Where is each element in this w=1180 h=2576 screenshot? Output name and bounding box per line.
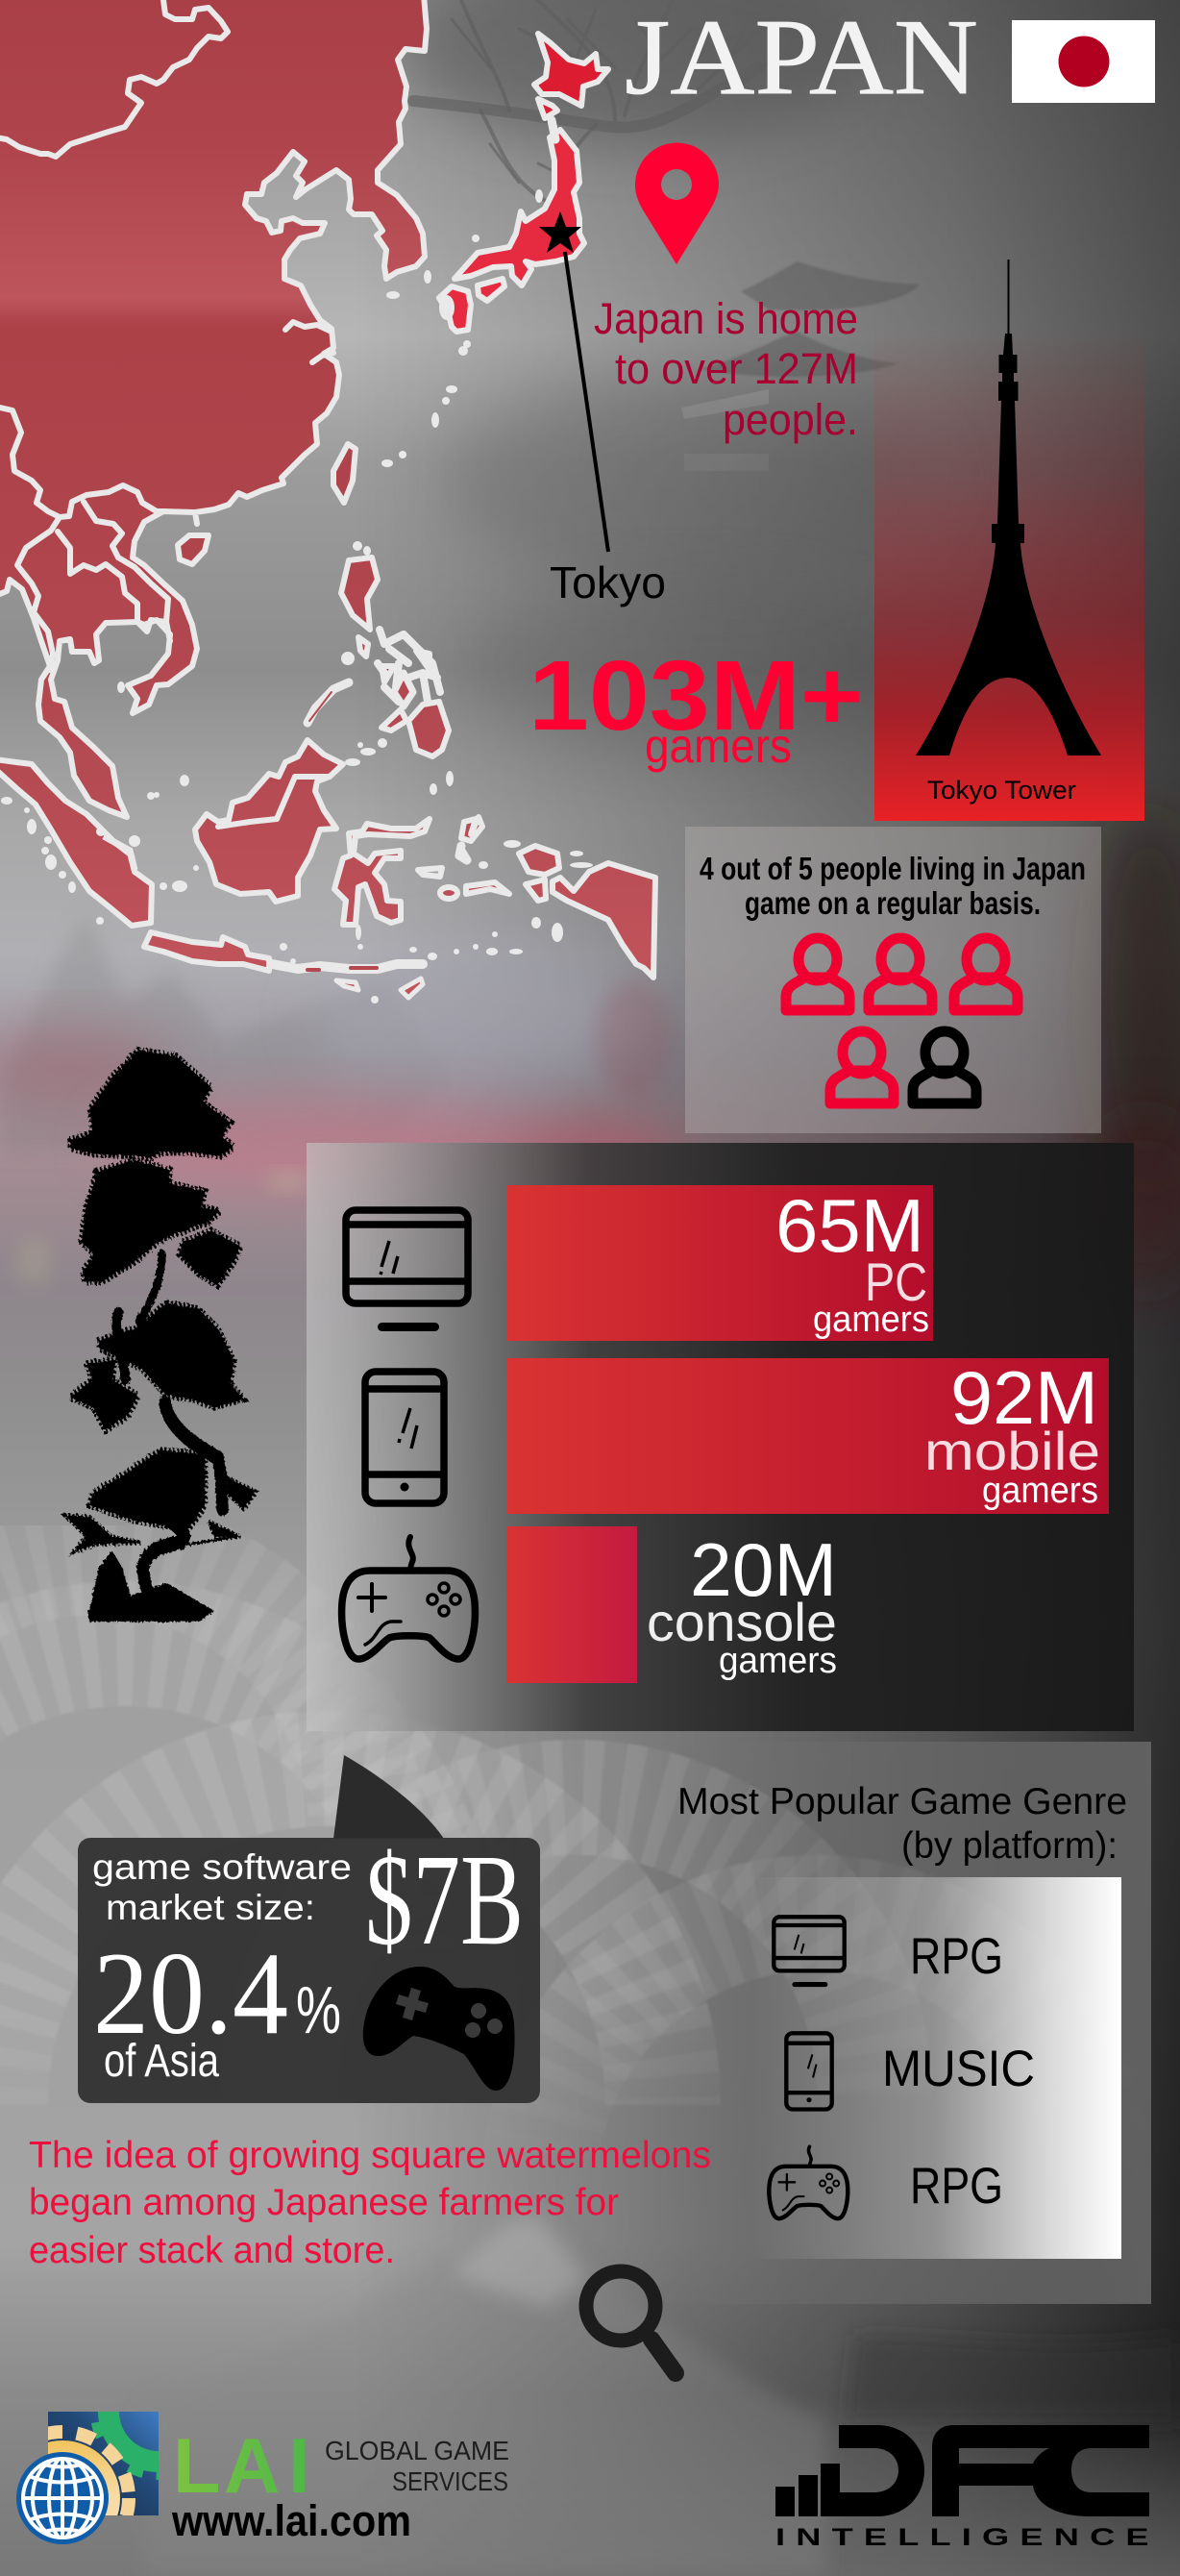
shark fin shape xyxy=(333,1755,444,1839)
bar: console xyxy=(506,1526,837,1683)
population text: to over 127M xyxy=(615,344,858,393)
genre row: pc rpg xyxy=(774,1917,1003,1987)
icon: japanese flag xyxy=(1012,20,1155,103)
genre row: mobile music: MUSIC xyxy=(882,2041,1035,2097)
bar: mobile: gamers xyxy=(982,1471,1098,1511)
lai url: www.lai.com xyxy=(171,2496,411,2545)
panel: market size: market size: xyxy=(106,1888,315,1927)
lai tagline: GLOBAL GAME xyxy=(325,2436,509,2465)
icon: tokyo tower xyxy=(916,260,1101,755)
bar: mobile: mobile xyxy=(924,1421,1100,1481)
bar: pc xyxy=(507,1183,933,1341)
lesser sunda xyxy=(272,964,423,969)
population text: Japan is home xyxy=(594,294,858,343)
panel: market size xyxy=(78,1755,540,2103)
lai emblem xyxy=(16,2412,159,2544)
dfc bars xyxy=(775,2464,840,2516)
palawan xyxy=(307,682,349,723)
new guinea head xyxy=(519,846,559,875)
mainland xyxy=(0,0,427,817)
stat: gamers total: 103M+ xyxy=(529,640,864,751)
genre heading: (by platform): xyxy=(901,1825,1118,1867)
lai tagline xyxy=(325,2436,509,2496)
genre row: mobile music xyxy=(786,2033,1035,2109)
bar: console: console xyxy=(647,1592,837,1652)
northern tip xyxy=(538,99,557,118)
lower right roof xyxy=(846,2335,1180,2422)
tokyo pointer line xyxy=(565,252,608,552)
hainan xyxy=(178,535,209,564)
bonsai tree silhouette xyxy=(64,1051,257,1621)
title: JAPAN xyxy=(625,0,978,117)
lai tagline: SERVICES xyxy=(392,2466,508,2496)
logo: lai xyxy=(16,2412,508,2544)
top pine branches xyxy=(413,0,846,207)
sulawesi xyxy=(334,819,430,925)
panel: market size: game software xyxy=(92,1847,352,1887)
panel: market size: $7B xyxy=(365,1828,524,1972)
mindanao xyxy=(408,702,449,756)
bar: pc: 65M xyxy=(775,1183,924,1268)
forest and autumn reds xyxy=(0,913,452,1153)
watermelon fact: The idea of growing square watermelons xyxy=(29,2135,711,2176)
icon: gamepad xyxy=(342,1537,475,1659)
panel: tokyo tower xyxy=(874,260,1144,821)
watermelon fact xyxy=(29,2135,711,2271)
people icons xyxy=(786,938,1018,1103)
panel text: 4 out of 5 people living in Japan xyxy=(700,851,1086,886)
watermelon fact: began among Japanese farmers for xyxy=(29,2182,619,2223)
bar: console: gamers xyxy=(719,1641,837,1681)
watermelon fact: easier stack and store. xyxy=(29,2230,395,2271)
hokkaido xyxy=(534,34,608,106)
bar: pc: PC xyxy=(865,1251,927,1312)
genre row: console rpg: RPG xyxy=(910,2158,1003,2215)
icon: black gamepad xyxy=(363,1967,515,2091)
panel: most popular genre xyxy=(615,1742,1151,2304)
taiwan xyxy=(333,444,356,503)
icon: star marking tokyo xyxy=(539,211,581,253)
panel: market size: of Asia xyxy=(104,2036,219,2087)
temple silhouette xyxy=(700,261,921,377)
panel: market size: 20.4 xyxy=(93,1927,288,2059)
sumatra xyxy=(0,759,152,926)
genre row: console rpg xyxy=(769,2146,1003,2218)
panel text: game on a regular basis. xyxy=(745,885,1041,921)
seram and buru xyxy=(466,882,509,894)
icon: phone xyxy=(364,1372,445,1503)
borders xyxy=(0,0,333,670)
japan xyxy=(439,34,608,332)
lai wordmark: LAI xyxy=(173,2423,310,2510)
bar: console: 20M xyxy=(690,1527,837,1612)
genre row: pc rpg: RPG xyxy=(910,1928,1003,1985)
tower caption: Tokyo Tower xyxy=(927,776,1076,805)
population text xyxy=(594,294,858,444)
luzon xyxy=(341,557,378,630)
bar: mobile xyxy=(507,1355,1109,1514)
halmahera xyxy=(461,817,482,841)
panel text xyxy=(700,851,1086,921)
stat: gamers total: gamers xyxy=(645,719,792,773)
population text: people. xyxy=(723,395,858,444)
small islands xyxy=(1,189,593,1003)
folding fans xyxy=(0,1525,922,2105)
misty hills xyxy=(442,375,942,586)
honshu xyxy=(455,130,584,285)
bar: pc: gamers xyxy=(813,1300,929,1340)
icon: magnifying glass xyxy=(586,2271,676,2373)
borneo xyxy=(195,740,343,902)
tokyo label: Tokyo xyxy=(550,557,666,607)
visayas cluster xyxy=(378,630,440,702)
panel: 4 out of 5 xyxy=(685,827,1101,1133)
java xyxy=(144,932,269,971)
panel: platforms xyxy=(307,1143,1134,1731)
shikoku xyxy=(478,279,504,301)
icon: monitor xyxy=(345,1210,469,1331)
dfc letters f and c xyxy=(932,2425,1149,2516)
genre heading xyxy=(677,1781,1127,1867)
papua xyxy=(553,863,655,978)
map of asia xyxy=(0,0,655,998)
dfc intelligence word: INTELLIGENCE xyxy=(775,2524,1149,2551)
mount fuji xyxy=(144,2216,826,2576)
kyushu xyxy=(439,286,471,332)
bar: mobile: 92M xyxy=(950,1355,1098,1440)
dfc letter d xyxy=(826,2425,924,2516)
logo: dfc intelligence xyxy=(775,2425,1149,2551)
panel: market size: % xyxy=(296,1972,341,2047)
icon: location pin xyxy=(635,142,719,264)
genre heading: Most Popular Game Genre xyxy=(677,1781,1127,1822)
